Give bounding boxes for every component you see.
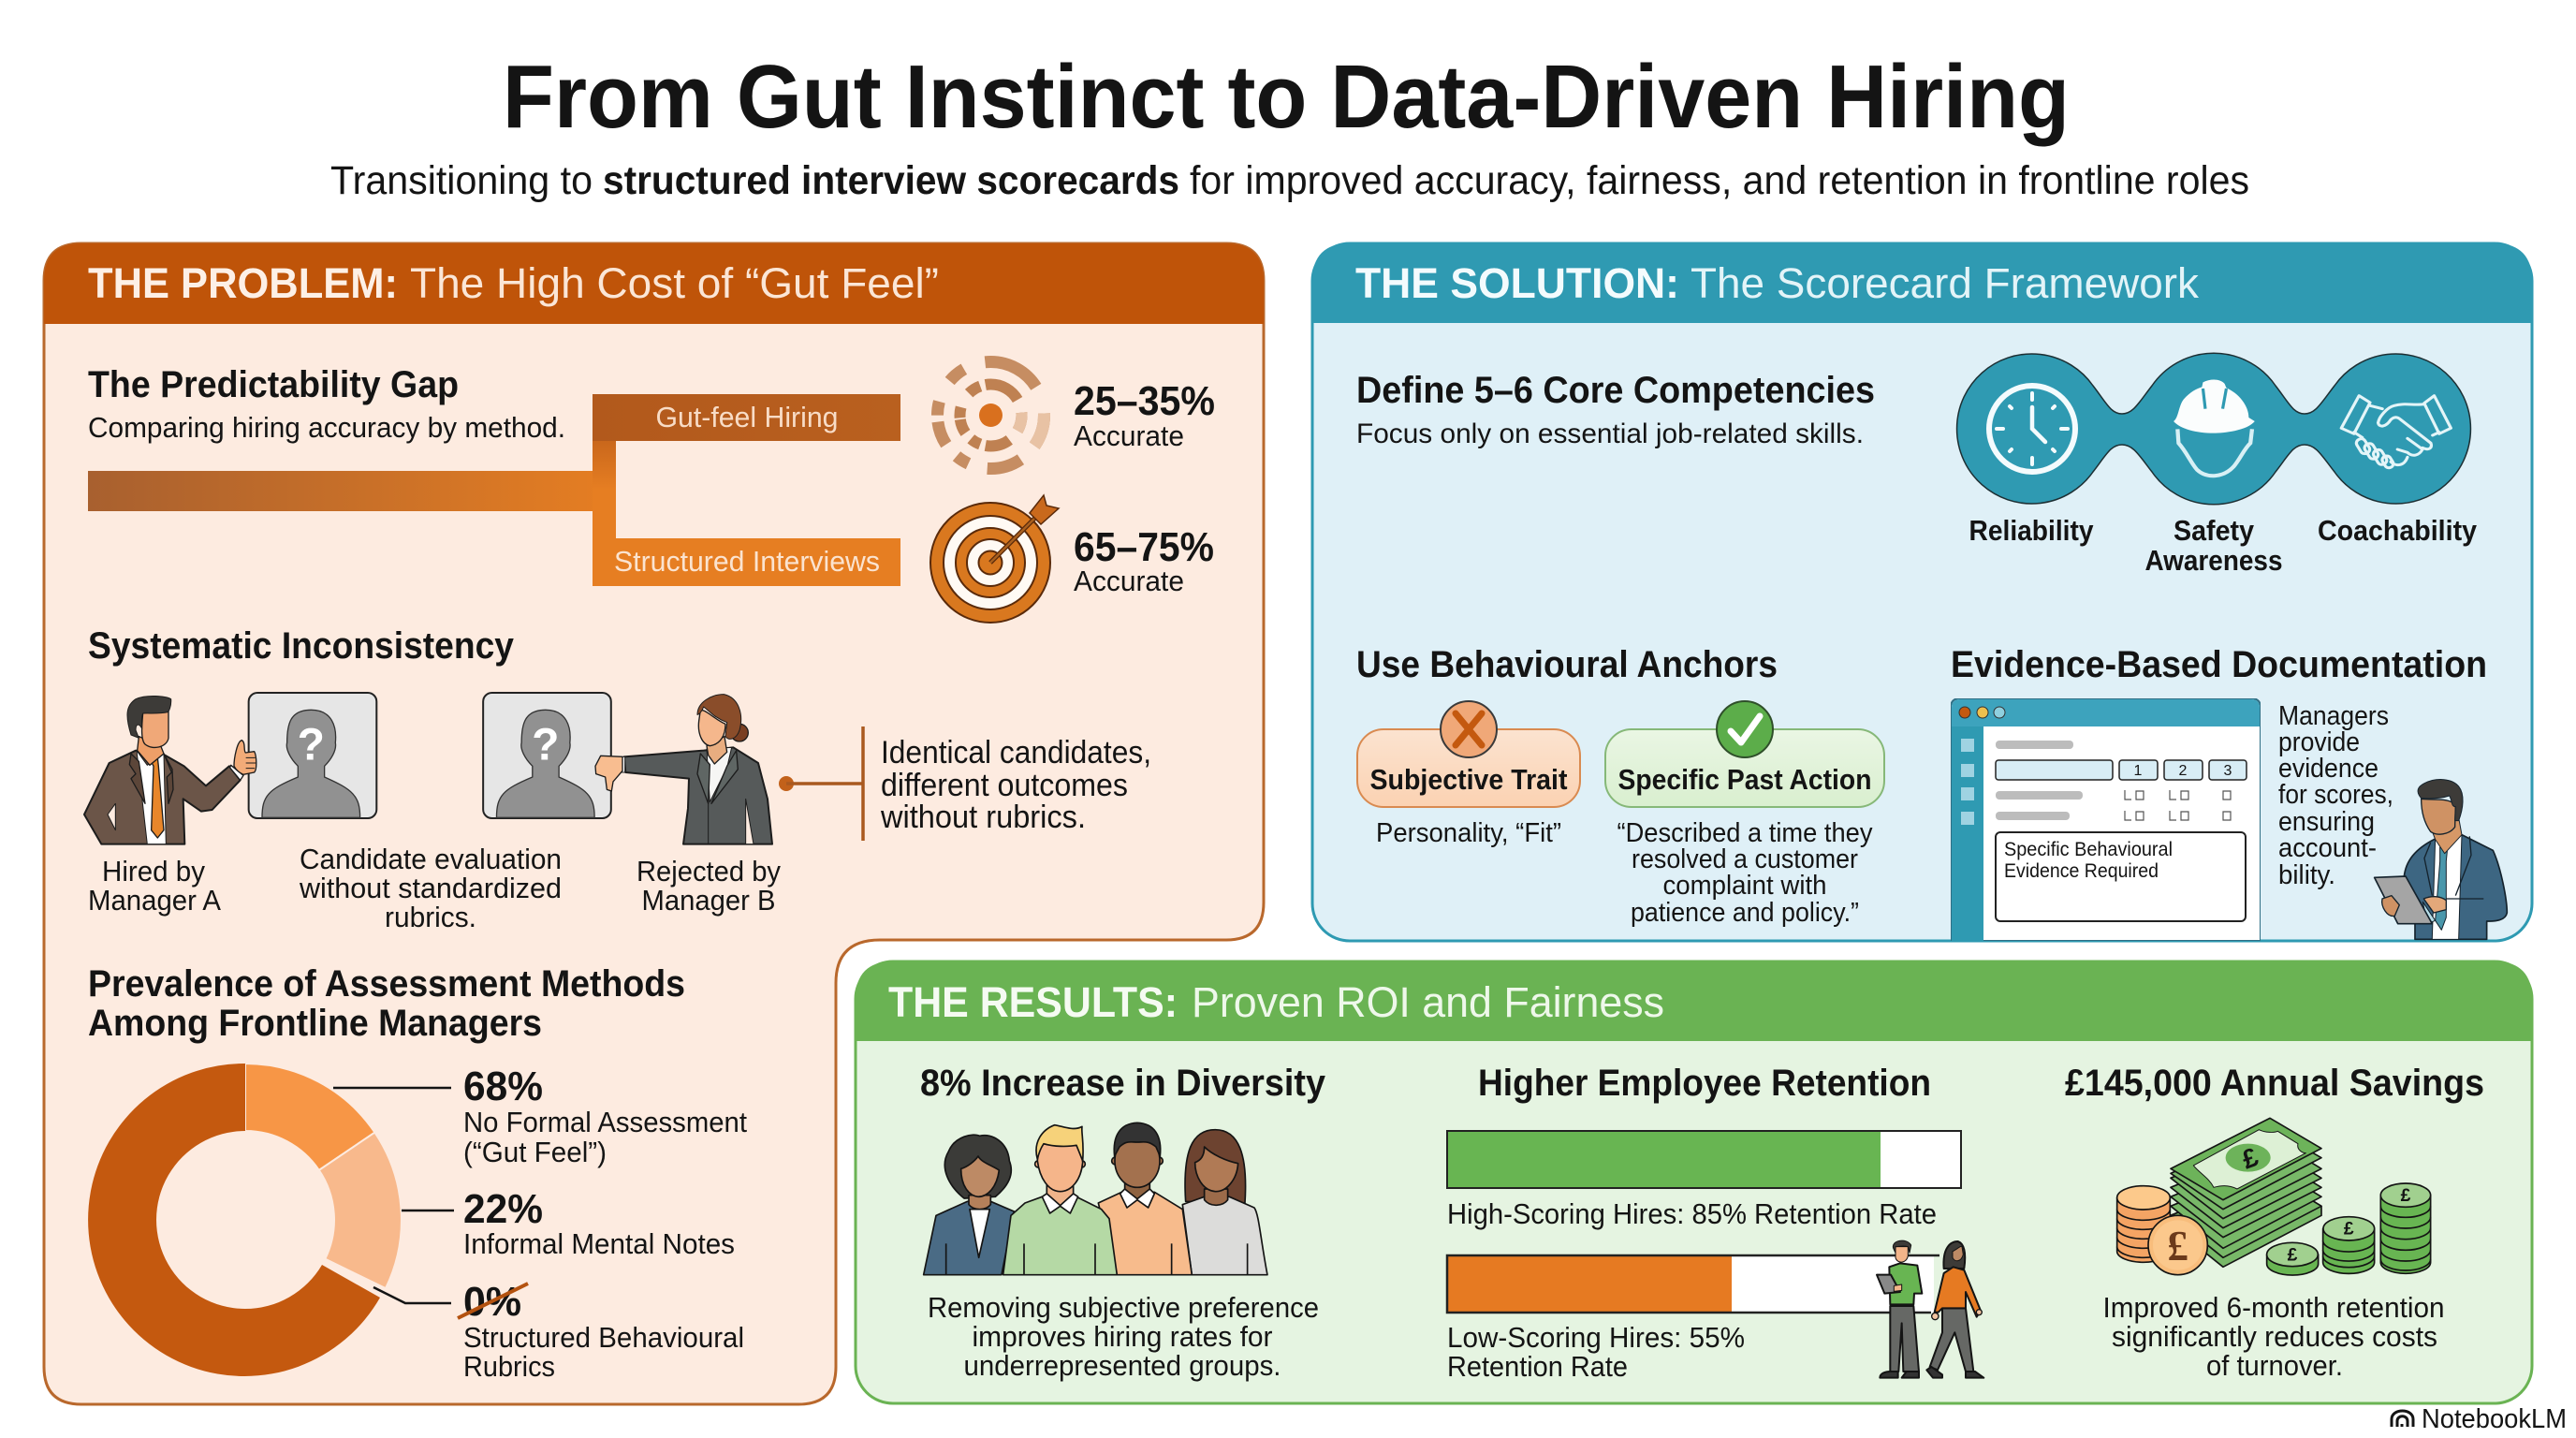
text: past action quote: “Described a time they bbox=[1617, 818, 1873, 848]
label: candidate evaluation bbox=[299, 843, 562, 933]
chart: forked accuracy funnel: Structured Interviews bbox=[614, 545, 880, 578]
chart: donut of assessment methods bbox=[88, 1064, 402, 1376]
text: 25-35% accurate: 25–35% bbox=[1074, 378, 1215, 424]
heading: prevalence of assessment methods: Prevalence of Assessment Methods bbox=[88, 963, 685, 1005]
heading: evidence-based documentation: Evidence-Based Documentation bbox=[1951, 644, 2487, 685]
icon: diverse group of people bbox=[924, 1123, 1267, 1275]
text: 65-75% accurate: Accurate bbox=[1074, 565, 1184, 597]
legend: 68% no formal assessment: 68% bbox=[463, 1064, 543, 1109]
chart: forked accuracy funnel bbox=[88, 394, 900, 586]
heading: systematic inconsistency: Systematic Inconsistency bbox=[88, 625, 515, 667]
panel: the solution bbox=[1312, 243, 2532, 941]
legend: 22% informal mental notes: 22% bbox=[463, 1186, 543, 1232]
legend: 0% structured behavioural rubrics bbox=[458, 1279, 744, 1383]
text: 65-75% accurate: 65–75% bbox=[1074, 524, 1214, 570]
label: candidate evaluation: rubrics. bbox=[385, 901, 476, 933]
label: low-scoring hires: Retention Rate bbox=[1447, 1350, 1628, 1383]
heading: define core competencies: Define 5–6 Core Competencies bbox=[1356, 370, 1875, 411]
text: focus on skills: Focus only on essential job-related skills. bbox=[1356, 418, 1864, 449]
NotebookLM watermark: NotebookLM bbox=[2422, 1404, 2567, 1434]
solution header: THE SOLUTION: bbox=[1355, 259, 1679, 307]
heading: 8% increase in diversity: 8% Increase in Diversity bbox=[920, 1063, 1326, 1104]
text: past action quote: complaint with bbox=[1662, 871, 1827, 901]
heading: prevalence of assessment methods: Among Frontline Managers bbox=[88, 1003, 542, 1044]
results header bbox=[856, 961, 2532, 1041]
label: low-scoring hires: Low-Scoring Hires: 55% bbox=[1447, 1321, 1745, 1354]
text: past action quote: resolved a customer bbox=[1632, 844, 1858, 874]
heading: prevalence of assessment methods bbox=[88, 963, 685, 1044]
icon: hard hat worker bbox=[2174, 380, 2255, 476]
callout: identical candidates bbox=[880, 735, 1151, 835]
solution header bbox=[1312, 243, 2532, 323]
text: 25-35% accurate: Accurate bbox=[1074, 419, 1184, 452]
icon: handshake bbox=[2341, 396, 2451, 469]
icon: manager with tablet bbox=[2375, 780, 2507, 939]
icon: manager B thumbs down bbox=[595, 695, 772, 844]
label: hired by manager A: Hired by bbox=[102, 855, 205, 888]
legend: 0% structured behavioural rubrics: 0% bbox=[463, 1279, 521, 1325]
title: From Gut Instinct to Data-Driven Hiring bbox=[503, 47, 2070, 147]
heading: annual savings: £145,000 Annual Savings bbox=[2065, 1063, 2484, 1104]
icon: clock bbox=[1989, 386, 2075, 472]
connected competency blob bbox=[1957, 353, 2470, 505]
icon: candidate card 1 bbox=[249, 693, 376, 818]
subtitle: structured interview scorecards bbox=[603, 158, 1179, 203]
icon: manager A thumbs up bbox=[84, 697, 256, 844]
results header: THE RESULTS: bbox=[888, 978, 1178, 1026]
callout connector bbox=[779, 726, 863, 841]
legend: 68% no formal assessment: No Formal Assessment bbox=[463, 1106, 747, 1138]
icon: candidate card 1: ? bbox=[298, 721, 325, 770]
card: subjective trait bbox=[1357, 701, 1580, 807]
scorecard window mockup: 1 bbox=[2134, 763, 2143, 779]
legend: 68% no formal assessment: (“Gut Feel”) bbox=[463, 1136, 607, 1168]
bar: high-scoring retention bbox=[1447, 1131, 1961, 1188]
legend: 22% informal mental notes: Informal Mental Notes bbox=[463, 1227, 735, 1260]
label: rejected by manager B bbox=[637, 855, 781, 917]
icon: candidate card 2 bbox=[483, 693, 611, 818]
icon: money stack and coins: £ bbox=[2167, 1223, 2188, 1269]
icon: x mark bbox=[1441, 701, 1497, 757]
text: managers provide evidence: evidence bbox=[2278, 754, 2378, 784]
text: removing subjective preference: underrepresented groups. bbox=[964, 1349, 1281, 1382]
label: coachability: Coachability bbox=[2318, 514, 2478, 547]
icon: bullseye target bbox=[930, 495, 1059, 623]
label: high-scoring hires: High-Scoring Hires: 85% Retention Rate bbox=[1447, 1197, 1937, 1230]
label: low-scoring hires bbox=[1447, 1321, 1745, 1383]
label: candidate evaluation: without standardized bbox=[299, 872, 562, 904]
label: rejected by manager B: Manager B bbox=[642, 884, 775, 917]
label: safety awareness bbox=[2145, 514, 2282, 577]
label: safety awareness: Awareness bbox=[2145, 544, 2282, 577]
icon: money stack and coins bbox=[2117, 1118, 2431, 1275]
heading: the predictability gap: The Predictability Gap bbox=[88, 364, 459, 405]
text: removing subjective preference: improves hiring rates for bbox=[972, 1320, 1273, 1353]
icon: broken target bbox=[938, 361, 1045, 468]
text: personality fit: Personality, “Fit” bbox=[1376, 818, 1561, 848]
callout: identical candidates: different outcomes bbox=[881, 768, 1128, 803]
label: safety awareness: Safety bbox=[2174, 514, 2255, 547]
text: 65-75% accurate bbox=[1074, 524, 1214, 597]
subtitle: for improved accuracy, fairness, and retention in frontline roles bbox=[1190, 158, 2249, 203]
bar: low-scoring retention bbox=[1447, 1255, 1939, 1313]
text: improved retention reduces costs: of turnover. bbox=[2206, 1349, 2343, 1382]
leader lines bbox=[333, 1088, 454, 1303]
text: managers provide evidence bbox=[2278, 701, 2393, 890]
icon: check mark bbox=[1717, 701, 1773, 757]
text: improved retention reduces costs: Improved 6-month retention bbox=[2102, 1291, 2445, 1324]
text: removing subjective preference: Removing subjective preference bbox=[928, 1291, 1319, 1324]
problem header: The High Cost of “Gut Feel” bbox=[410, 259, 939, 307]
legend: 22% informal mental notes bbox=[463, 1186, 735, 1260]
results header: Proven ROI and Fairness bbox=[1192, 978, 1664, 1026]
scorecard window mockup: Specific Behavioural bbox=[2004, 839, 2173, 860]
text: managers provide evidence: ensuring bbox=[2278, 807, 2375, 837]
scorecard window mockup bbox=[1951, 698, 2261, 941]
icon: candidate card 2: ? bbox=[532, 721, 559, 770]
scorecard window mockup: 2 bbox=[2179, 763, 2188, 779]
solution header: The Scorecard Framework bbox=[1690, 259, 2199, 307]
text: managers provide evidence: account- bbox=[2278, 833, 2377, 863]
text: removing subjective preference bbox=[928, 1291, 1319, 1382]
subtitle bbox=[330, 158, 2249, 203]
card: subjective trait: Subjective Trait bbox=[1370, 763, 1567, 796]
text: comparing accuracy: Comparing hiring accuracy by method. bbox=[88, 411, 565, 444]
icon: money stack and coins: £ bbox=[2344, 1220, 2354, 1240]
card: specific past action bbox=[1605, 701, 1884, 807]
callout: identical candidates: Identical candidates, bbox=[881, 735, 1151, 770]
label: reliability: Reliability bbox=[1969, 514, 2094, 547]
panel: the results bbox=[856, 961, 2532, 1403]
text: managers provide evidence: for scores, bbox=[2278, 780, 2393, 810]
legend: 68% no formal assessment bbox=[463, 1064, 747, 1168]
text: improved retention reduces costs bbox=[2102, 1291, 2445, 1382]
label: candidate evaluation: Candidate evaluation bbox=[300, 843, 562, 875]
text: past action quote: patience and policy.” bbox=[1631, 898, 1859, 928]
legend: 0% structured behavioural rubrics: Structured Behavioural bbox=[463, 1321, 744, 1354]
text: 25-35% accurate bbox=[1074, 378, 1215, 452]
chart: forked accuracy funnel: Gut-feel Hiring bbox=[655, 401, 839, 433]
subtitle: Transitioning to bbox=[330, 158, 593, 203]
icon: two employees standing bbox=[1877, 1240, 1983, 1378]
legend: 0% structured behavioural rubrics: Rubrics bbox=[463, 1350, 555, 1383]
icon: money stack and coins: £ bbox=[2288, 1245, 2298, 1265]
text: managers provide evidence: bility. bbox=[2278, 860, 2335, 890]
heading: higher employee retention: Higher Employee Retention bbox=[1478, 1063, 1931, 1104]
text: managers provide evidence: Managers bbox=[2278, 701, 2389, 731]
panel: the problem bbox=[44, 243, 1264, 1404]
label: hired by manager A bbox=[88, 855, 221, 917]
problem header: THE PROBLEM: bbox=[88, 259, 398, 307]
icon: money stack and coins: £ bbox=[2238, 1142, 2262, 1175]
label: rejected by manager B: Rejected by bbox=[637, 855, 781, 888]
callout: identical candidates: without rubrics. bbox=[880, 800, 1086, 835]
icon: money stack and coins: £ bbox=[2401, 1186, 2411, 1206]
text: managers provide evidence: provide bbox=[2278, 727, 2360, 757]
text: past action quote bbox=[1617, 818, 1873, 928]
problem header bbox=[44, 243, 1264, 324]
label: hired by manager A: Manager A bbox=[88, 884, 221, 917]
scorecard window mockup: 3 bbox=[2224, 763, 2232, 779]
text: improved retention reduces costs: significantly reduces costs bbox=[2112, 1320, 2437, 1353]
heading: use behavioural anchors: Use Behavioural Anchors bbox=[1356, 644, 1778, 685]
scorecard window mockup: Evidence Required bbox=[2004, 860, 2159, 882]
card: specific past action: Specific Past Action bbox=[1617, 763, 1872, 796]
